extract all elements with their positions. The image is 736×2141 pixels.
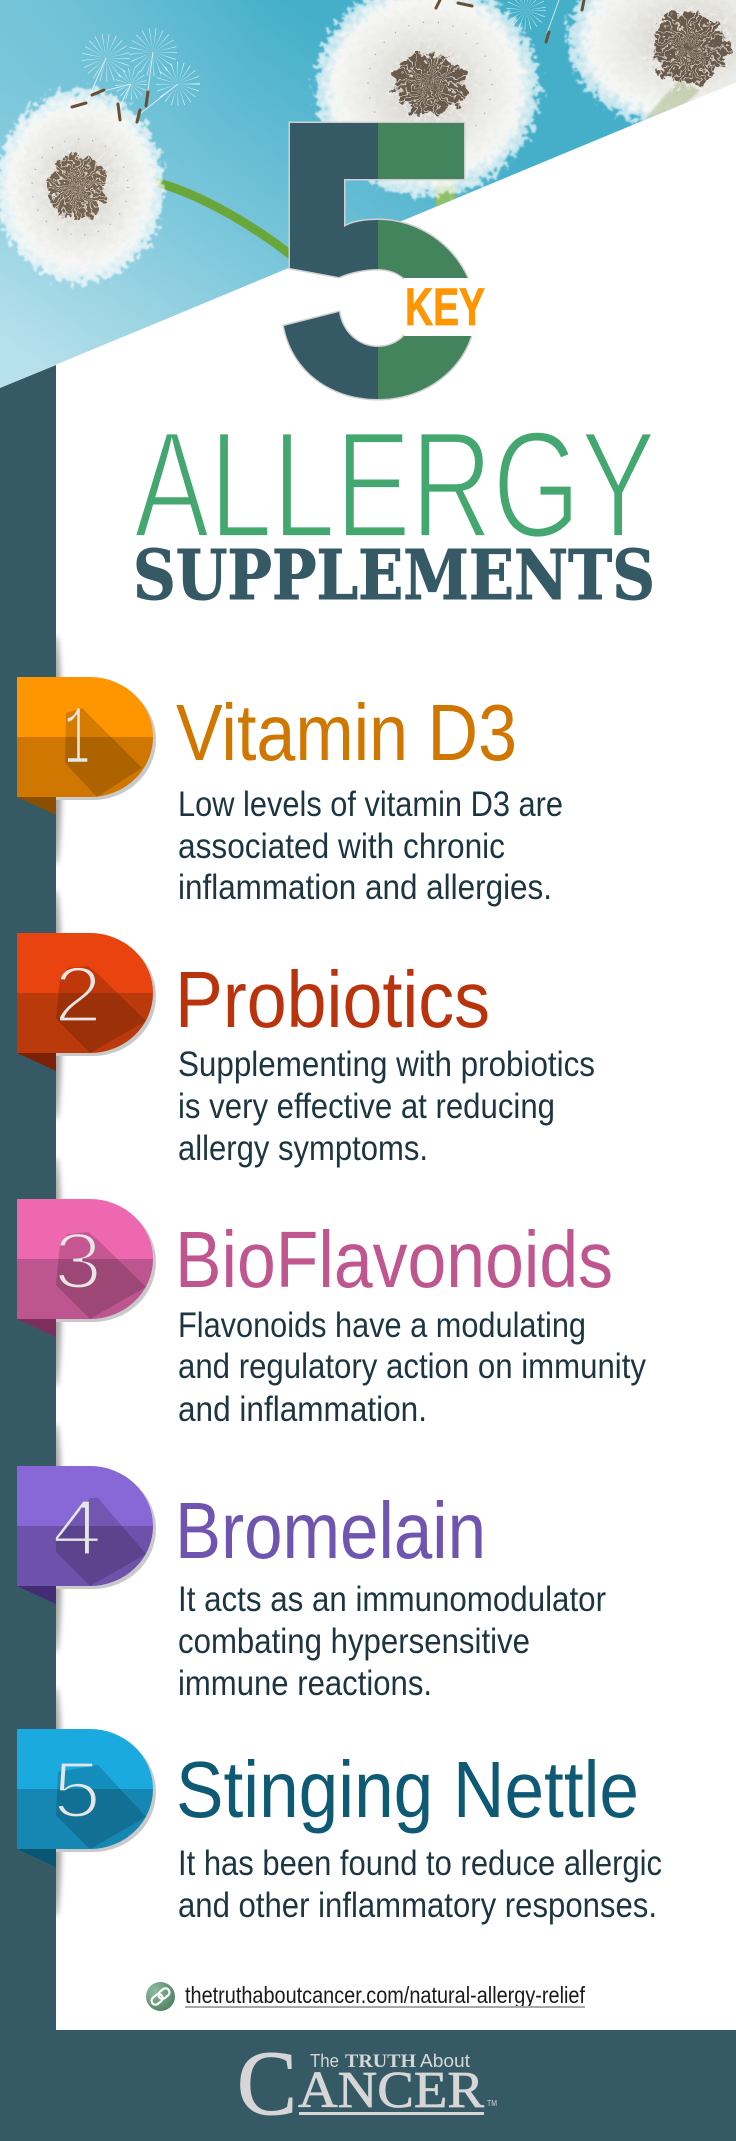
panel: BioFlavonoids <box>17 1199 646 1429</box>
badge 2 <box>17 933 157 1071</box>
source link <box>146 1982 586 2011</box>
number 3 <box>59 1234 96 1288</box>
description <box>178 1844 662 1925</box>
description: Low levels of vitamin D3 are <box>178 785 563 824</box>
description: It acts as an immunomodulator <box>178 1580 606 1619</box>
description: immune reactions. <box>178 1664 432 1703</box>
badge 1 <box>17 677 157 815</box>
panel: Vitamin D3 <box>17 677 563 907</box>
panel: Bromelain <box>17 1466 606 1703</box>
footer bar <box>0 2030 736 2141</box>
heading: Probiotics <box>175 955 490 1044</box>
dandelion: right <box>568 0 736 135</box>
number 1 <box>68 708 88 762</box>
logo: The Truth About Cancer <box>237 2032 497 2134</box>
panel: Stinging Nettle <box>17 1729 662 1925</box>
number 2 <box>60 968 96 1020</box>
logo: The Truth About Cancer: TRUTH <box>345 2051 416 2072</box>
dandelion: left <box>0 89 164 283</box>
title: SUPPLEMENTS: SUPPLEMENTS <box>133 536 655 616</box>
sidebar <box>0 365 56 2141</box>
url text: thetruthaboutcancer.com/natural-allergy-relief <box>185 1982 586 2008</box>
logo: The Truth About Cancer: The <box>310 2051 339 2071</box>
description: It has been found to reduce allergic <box>178 1844 662 1883</box>
big numeral 5 <box>284 123 486 399</box>
icon: link <box>146 1982 175 2011</box>
stem: left dandelion <box>155 182 292 256</box>
number 5 <box>58 1764 96 1816</box>
description: Supplementing with probiotics <box>178 1045 595 1084</box>
heading: BioFlavonoids <box>175 1215 613 1304</box>
description <box>178 1045 595 1168</box>
number 4 <box>56 1502 98 1554</box>
logo: The Truth About Cancer: About <box>420 2051 470 2071</box>
description: is very effective at reducing <box>178 1087 555 1126</box>
description: allergy symptoms. <box>178 1129 428 1168</box>
hero photo: dandelions on blue sky <box>0 0 736 400</box>
logo: The Truth About Cancer: ANCER <box>298 2062 484 2119</box>
heading: Stinging Nettle <box>176 1745 639 1834</box>
description: combating hypersensitive <box>178 1622 530 1661</box>
badge 4 <box>17 1466 157 1604</box>
description <box>178 1580 606 1703</box>
description: inflammation and allergies. <box>178 868 552 907</box>
badge 5 <box>17 1729 157 1867</box>
KEY label: KEY <box>405 278 485 337</box>
logo: The Truth About Cancer: TM <box>487 2099 497 2108</box>
heading: Bromelain <box>175 1486 486 1575</box>
description: and inflammation. <box>178 1390 427 1429</box>
description <box>178 785 563 907</box>
floating seeds <box>72 0 584 122</box>
dandelion: centre <box>315 0 539 196</box>
badge 3 <box>17 1199 157 1337</box>
description: Flavonoids have a modulating <box>178 1306 586 1345</box>
panel: Probiotics <box>17 933 595 1168</box>
description: associated with chronic <box>178 827 505 866</box>
description <box>178 1306 646 1429</box>
logo: The Truth About Cancer: C <box>237 2032 297 2134</box>
stem: centre dandelion <box>436 180 455 207</box>
heading: Vitamin D3 <box>176 688 517 777</box>
description: and regulatory action on immunity <box>178 1347 646 1386</box>
description: and other inflammatory responses. <box>178 1886 657 1925</box>
sidebar shadows <box>50 635 62 1917</box>
